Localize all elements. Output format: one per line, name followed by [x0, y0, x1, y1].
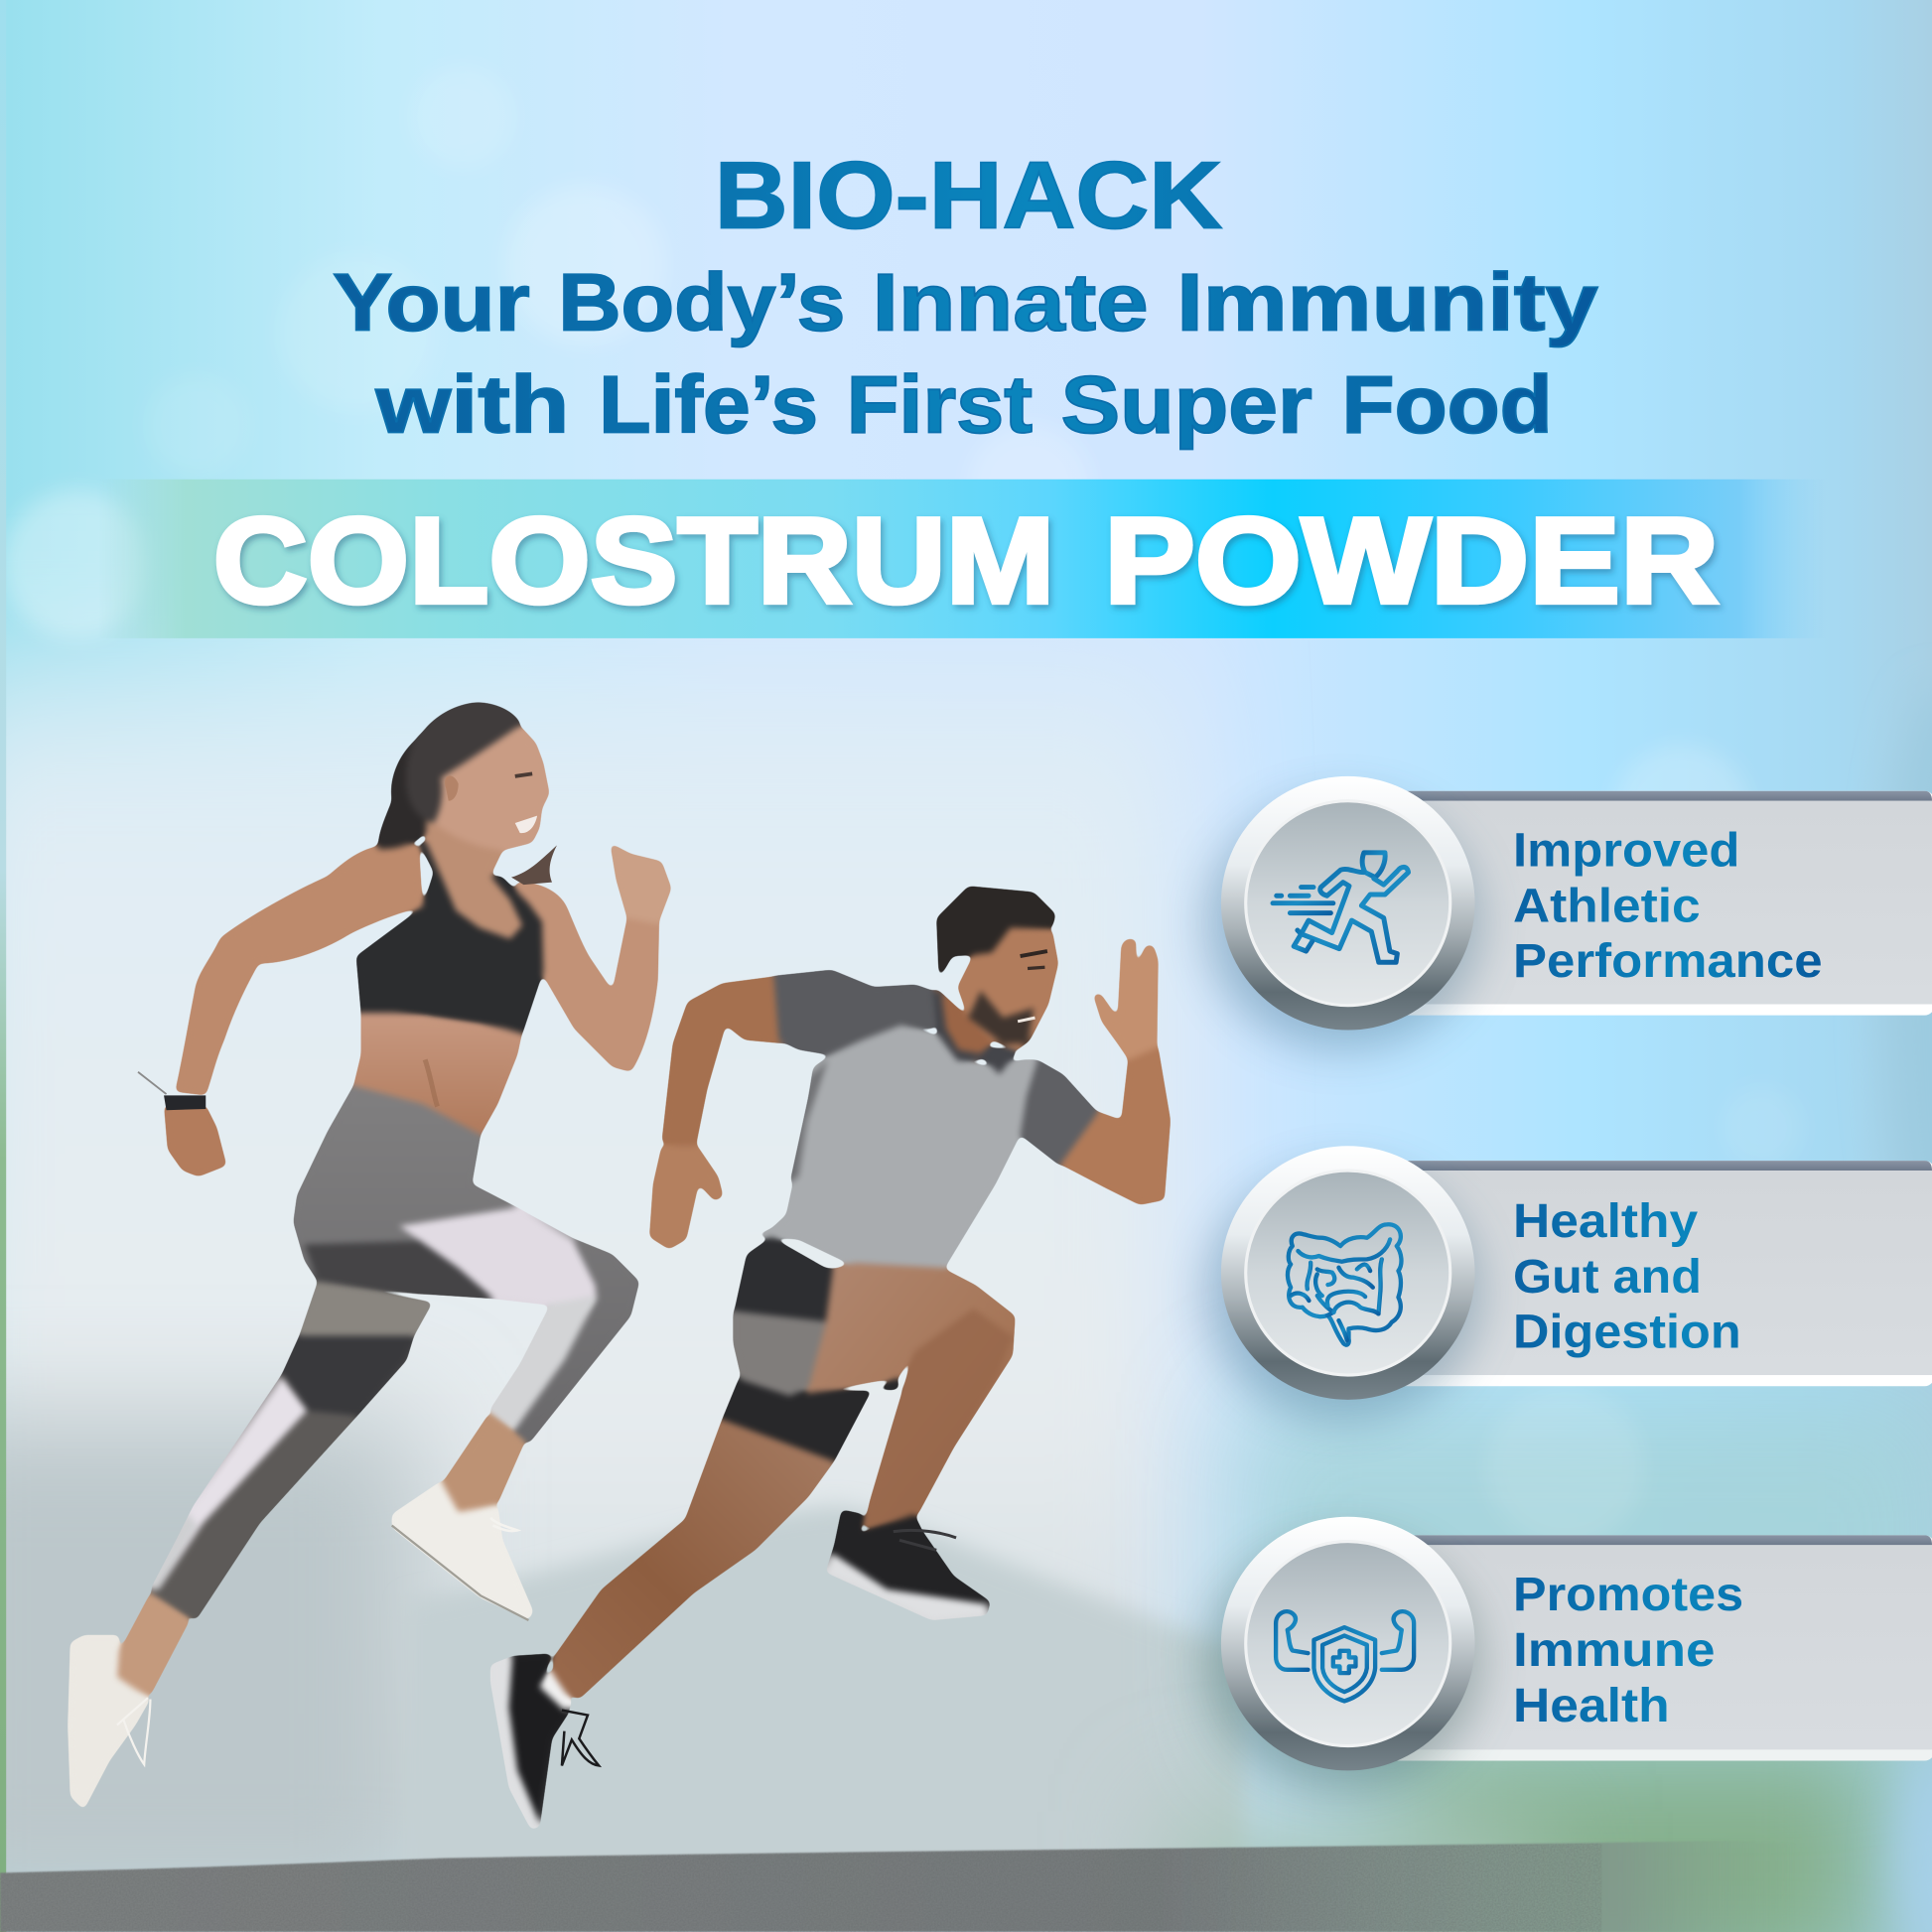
back shoe laces — [117, 1698, 150, 1764]
icon disc — [1221, 1517, 1475, 1770]
label: Immune — [1513, 1623, 1716, 1677]
left hand — [164, 1105, 226, 1176]
t-shirt — [755, 1026, 1037, 1272]
heading: Immunity — [1176, 258, 1598, 348]
left arm — [175, 844, 423, 1095]
right arm — [515, 883, 659, 1072]
label: Gut and — [1513, 1250, 1702, 1304]
front shoe — [392, 1481, 533, 1620]
sports bra — [356, 843, 543, 1034]
loose hair — [511, 845, 557, 885]
back shoe — [68, 1635, 150, 1810]
heading: First — [847, 360, 1033, 451]
shadow — [1205, 1169, 1481, 1420]
front shoe laces — [490, 1518, 517, 1531]
heading: Innate — [873, 258, 1149, 348]
front shoe sole — [392, 1525, 528, 1620]
front leg — [807, 1263, 1016, 1528]
left hand — [649, 1146, 724, 1249]
right arm — [1053, 1047, 1171, 1205]
label: Health — [1513, 1679, 1670, 1732]
legging mesh panel — [489, 1297, 598, 1430]
face — [957, 928, 1058, 1049]
card body — [1355, 1535, 1932, 1760]
front shoe — [826, 1509, 991, 1620]
heading: Body’s — [558, 258, 845, 348]
hair — [936, 886, 1056, 980]
label: Promotes — [1513, 1568, 1743, 1621]
label: Athletic — [1513, 879, 1701, 932]
icon disc — [1221, 1146, 1475, 1400]
back shoe — [490, 1654, 571, 1830]
beard — [968, 991, 1034, 1043]
label — [1513, 1568, 1743, 1732]
icon: runner — [1273, 853, 1409, 962]
collar — [932, 991, 1018, 1074]
hair — [406, 702, 521, 823]
back leg — [117, 1282, 433, 1696]
back leg — [552, 1420, 834, 1699]
label: Digestion — [1513, 1306, 1741, 1359]
icon: shield with arms — [1276, 1611, 1414, 1701]
head — [431, 727, 550, 850]
right hand — [610, 843, 671, 924]
label: Improved — [1513, 823, 1739, 877]
product name — [213, 493, 1719, 629]
neck and chest — [426, 818, 522, 939]
shadow — [1205, 1539, 1481, 1790]
legging white panel — [399, 1207, 597, 1305]
heading — [333, 143, 1598, 451]
dark thigh underside — [305, 1241, 494, 1299]
photo: woman runner — [68, 702, 671, 1810]
product name: POWDER — [1104, 493, 1719, 629]
photo: man runner — [490, 886, 1171, 1830]
wrist band — [164, 1095, 206, 1110]
shirt sleeve right — [1021, 1059, 1098, 1166]
shadow — [1205, 798, 1481, 1049]
front shoe laces — [894, 1530, 956, 1550]
heading: Life’s — [599, 360, 818, 451]
front ankle — [439, 1414, 525, 1513]
face details — [1018, 951, 1047, 1022]
product name: COLOSTRUM — [213, 493, 1054, 629]
heading: Super — [1061, 360, 1312, 451]
label — [1513, 1194, 1741, 1359]
feature card: healthy gut — [1205, 1146, 1932, 1420]
card body — [1355, 791, 1932, 1016]
torso — [353, 1008, 522, 1135]
label: Healthy — [1513, 1194, 1698, 1248]
leggings — [293, 1085, 639, 1445]
icon disc — [1221, 776, 1475, 1031]
ponytail — [378, 737, 436, 849]
shorts — [733, 1237, 838, 1327]
feature card: immune health — [1205, 1517, 1932, 1790]
card body — [1355, 1161, 1932, 1386]
heading: Your — [333, 258, 530, 348]
neck — [935, 987, 992, 1061]
muscle shading — [425, 1059, 438, 1106]
label: Performance — [1513, 934, 1823, 988]
shirt sleeve left — [773, 970, 935, 1054]
face details — [445, 773, 537, 833]
shirt dark side panel — [790, 1059, 828, 1182]
heading: Food — [1342, 360, 1553, 451]
wrist charm — [138, 1072, 167, 1094]
heading: with — [374, 360, 569, 451]
icon: intestines — [1288, 1224, 1401, 1345]
label — [1513, 823, 1823, 988]
right hand — [1093, 939, 1159, 1059]
left arm — [661, 976, 783, 1151]
banner — [98, 480, 1826, 638]
feature card: improved athletic performance — [1205, 776, 1932, 1049]
back shoe laces — [562, 1711, 599, 1765]
heading: BIO-HACK — [715, 143, 1222, 249]
